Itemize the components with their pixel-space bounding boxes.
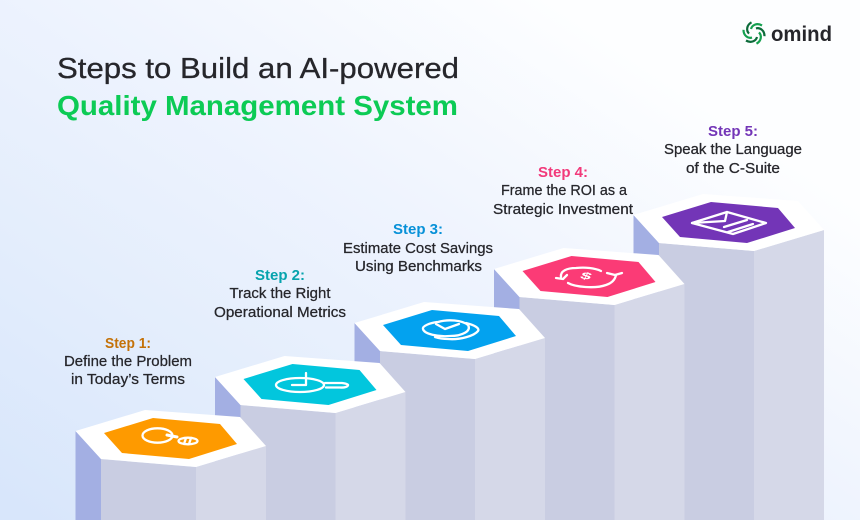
logo: omind [742,22,832,46]
step 5 label: Step 5: [708,123,758,140]
icon: stopwatch [276,373,348,392]
icon: circular dollar arrows [556,268,622,287]
step 3 column [354,302,545,520]
step 4 label: Strategic Investment [493,202,633,218]
step 2 label [214,267,346,321]
title: Steps to Build an AI-powered [57,53,459,85]
step 3 label: Step 3: [393,221,443,238]
icon: circular dollar arrows: $ [578,270,594,282]
step 4 column [494,248,684,520]
step 4 label [493,164,633,218]
logo: omind: omind [771,23,832,46]
icon: envelope [692,212,766,234]
step 2 column [215,356,406,520]
title [57,53,459,121]
step 5 label: of the C-Suite [686,161,780,177]
step 2 label: Track the Right [230,286,330,302]
step 1 label [64,335,192,388]
step 4 label: Step 4: [538,164,588,181]
step 5 label [664,123,802,177]
title: Quality Management System [57,90,458,121]
step 1 label: in Today’s Terms [71,372,185,388]
icon: message check [423,320,478,339]
step 1 label: Define the Problem [64,354,192,370]
step 2 label: Operational Metrics [214,305,346,321]
step 3 label [343,221,493,275]
step 2 label: Step 2: [255,267,305,284]
step 4 label: Frame the ROI as a [501,183,628,199]
icon: light bulb [142,428,198,444]
step 3 label: Estimate Cost Savings [343,241,493,257]
step 3 label: Using Benchmarks [355,259,482,275]
step 1 column [76,410,266,520]
step 5 column [634,194,824,520]
step 5 label: Speak the Language [664,142,802,158]
step 1 label: Step 1: [105,335,151,352]
